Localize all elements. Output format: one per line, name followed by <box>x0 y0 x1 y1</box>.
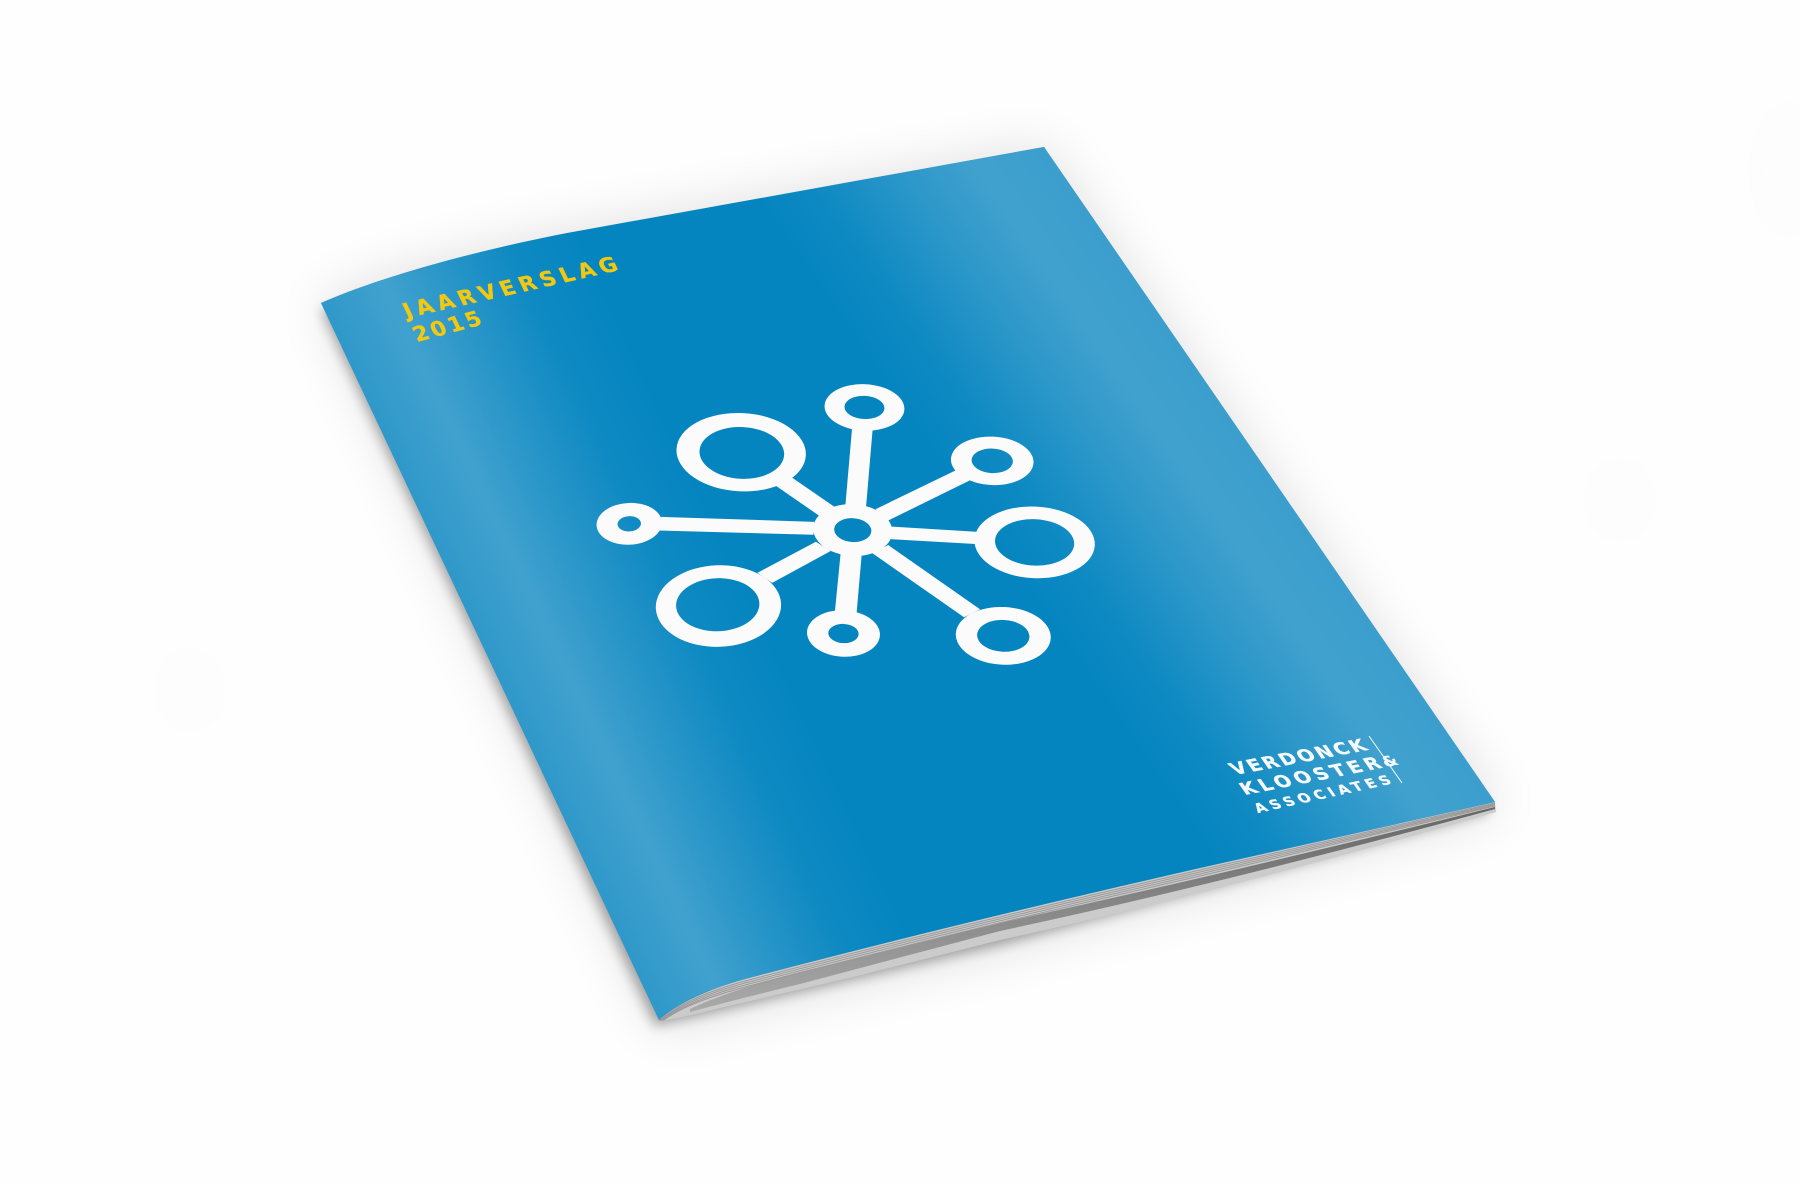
logo: Verdonck Klooster & Associates: VERDONCK <box>1225 736 1373 779</box>
node: bottom left <box>654 563 783 649</box>
logo: Verdonck Klooster & Associates: KLOOSTER <box>1235 754 1386 799</box>
logo divider <box>1369 736 1402 783</box>
logo: Verdonck Klooster & Associates: & <box>1377 752 1402 770</box>
stacked page lines <box>659 803 1495 1024</box>
node: right <box>972 504 1097 581</box>
brochure shadow <box>321 147 1496 1030</box>
brochure page edges <box>659 802 1496 1024</box>
node: bottom <box>806 609 881 659</box>
title: Jaarverslag 2015: JAARVERSLAG <box>397 253 622 324</box>
title: Jaarverslag 2015: 2015 <box>409 307 486 347</box>
spokes <box>659 428 980 617</box>
node: top <box>823 382 906 433</box>
node: top left <box>674 410 808 495</box>
logo: Verdonck Klooster & Associates: ASSOCIATES <box>1251 773 1395 816</box>
node: center <box>811 502 894 559</box>
dark inner gap between pages <box>690 807 1495 1012</box>
cover shading right <box>321 147 1495 1020</box>
background faint reflections <box>160 90 1800 740</box>
logo: Verdonck Klooster & Associates <box>1225 736 1402 816</box>
node: top right <box>950 435 1035 487</box>
node: left <box>595 501 663 546</box>
network icon <box>595 382 1097 667</box>
brochure cover <box>321 147 1495 1020</box>
node: bottom right <box>954 605 1052 667</box>
cover shading left <box>321 147 1495 1020</box>
